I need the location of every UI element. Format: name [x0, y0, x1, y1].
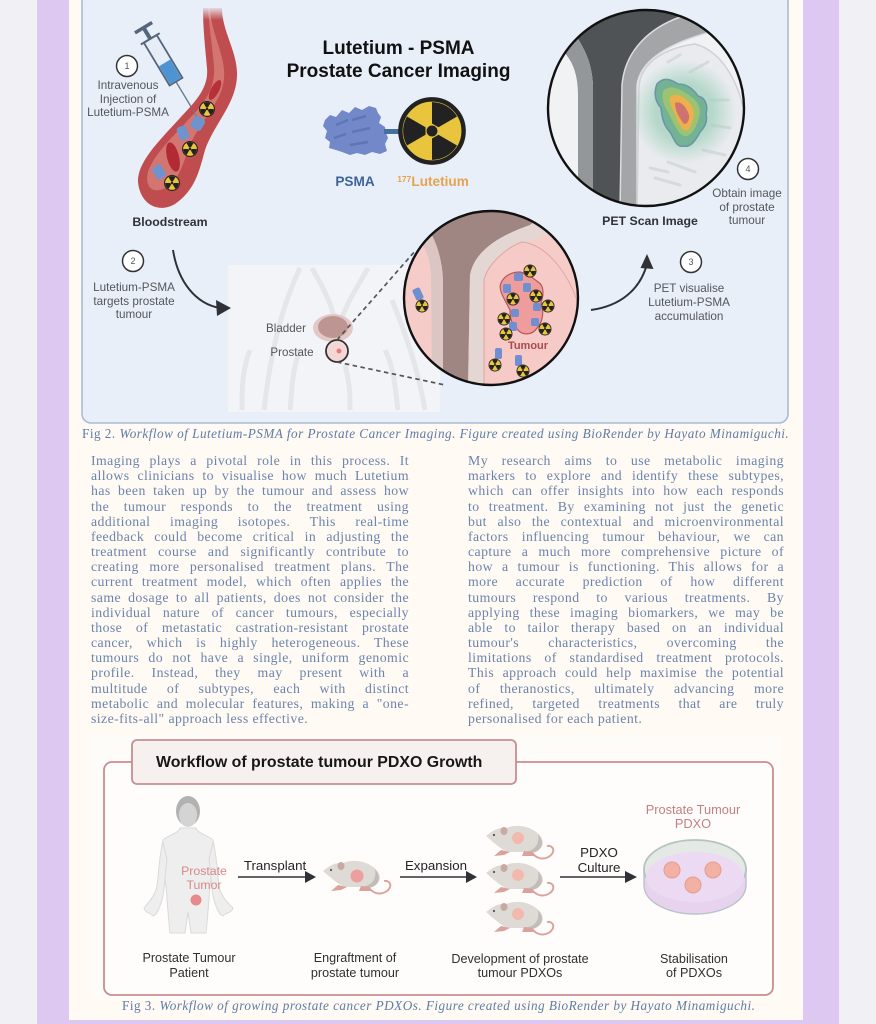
panel: PDXO workflow [90, 735, 780, 1000]
step 3 label: accumulation [655, 310, 723, 323]
PSMA label: PSMA [335, 174, 375, 189]
text block: right column: factors influencing tumour behaviour, we can [468, 529, 784, 544]
text block: right column: personalised for each patient. [468, 711, 642, 726]
arrow: PET visualise [591, 254, 654, 310]
caption: patient: Patient [169, 966, 209, 980]
text block: left column: profile. Instead, they may present with a [91, 665, 409, 680]
icon: PSMA protein [323, 106, 388, 155]
caption: engraftment: prostate tumour [311, 966, 399, 980]
caption: patient [142, 951, 236, 980]
icon: patient body [144, 796, 233, 933]
text block: left column: tumours do not have a single, uniform genomic [91, 650, 409, 665]
text block: left column: additional imaging isotopes. This real-time [91, 514, 409, 529]
icon: syringe [134, 22, 202, 116]
177Lutetium label: 177 [397, 174, 412, 184]
caption: patient: Prostate Tumour [142, 951, 236, 965]
arrow: targets prostate [173, 250, 231, 316]
step 1 label: Injection of [100, 93, 157, 106]
step 4 label: tumour [729, 214, 765, 227]
text block: left column: those of metastatic castration-resistant prostate [91, 620, 409, 635]
text block: left column: has been taken up by the tumour and assess how [91, 483, 409, 498]
text block: right column [468, 453, 784, 726]
text block: right column: refined, targeted treatments that are truly [468, 696, 784, 711]
step 3 label: PET visualise [654, 282, 724, 295]
step 4 label: of prostate [719, 201, 775, 214]
title [287, 38, 510, 82]
PDXO culture arrow: PDXO [580, 845, 618, 860]
text block: right column: which can offer insights into how each responds [468, 483, 784, 498]
bladder label: Bladder [266, 322, 306, 335]
prostate tumour PDXO label: PDXO [675, 816, 711, 831]
177Lutetium label: Lutetium [411, 174, 469, 189]
step 1 label: Lutetium-PSMA [87, 106, 169, 119]
PDXO culture arrow [560, 845, 637, 883]
step 1 label [87, 56, 169, 119]
text block: right column: limitations of standardised treatment protocols. [468, 650, 784, 665]
panel: Lutetium-PSMA imaging figure [82, 0, 788, 423]
caption: development: Development of prostate [451, 952, 589, 966]
step 2 label: 2 [130, 256, 136, 266]
step 1 label: Intravenous [97, 79, 159, 92]
figure 2 caption: Fig 2. Workflow of Lutetium-PSMA for Prostate Cancer Imaging. Figure created using BioRender by Hayato Minamiguchi. [82, 426, 789, 441]
text block: left column: allows clinicians to visualise how much Lutetium [91, 468, 409, 483]
text block: left column: Imaging plays a pivotal role in this process. It [91, 453, 409, 468]
text block: left column: feedback could become critical in adjusting the [91, 529, 409, 544]
caption: stabilisation [660, 952, 728, 980]
title: Lutetium - PSMA [322, 38, 475, 59]
icon: PSMA connector [384, 129, 400, 134]
caption: stabilisation: of PDXOs [666, 966, 722, 980]
text block: right column: how a tumour is functioning. This allows for a [468, 559, 784, 574]
text block: left column: individual nature of cancer tumours, especially [91, 605, 409, 620]
text block: right column: able to tailor therapy based on an individual [468, 620, 784, 635]
transplant arrow: Transplant [244, 858, 306, 873]
text block: left column: current treatment model, which often applies the [91, 574, 409, 589]
caption: engraftment: Engraftment of [314, 951, 397, 965]
step 2 label: targets prostate [93, 295, 175, 308]
step 3 label: Lutetium-PSMA [648, 296, 730, 309]
text block: right column: capture a much more comprehensive picture of [468, 544, 784, 559]
text block: right column: of theranostics, ultimately advancing more [468, 681, 784, 696]
text block: right column: markers to explore and identify these subtypes, [468, 468, 784, 483]
expansion arrow [400, 858, 477, 883]
text block: right column: but also the contextual and microenvironmental [468, 514, 784, 529]
PET scan label: PET Scan Image [602, 214, 698, 228]
step 4 label: 4 [745, 164, 751, 174]
caption: engraftment [311, 951, 399, 980]
title: Prostate Cancer Imaging [287, 61, 510, 82]
step 3 label: 3 [688, 257, 694, 267]
zoom circle: tumour with Lutetium-PSMA [402, 210, 580, 386]
text block: right column: more accurate prediction of how different [468, 574, 784, 589]
text block: left column: metabolic and molecular features, making a "one- [91, 696, 409, 711]
text block: left column: creating more personalised treatment plans. The [91, 559, 409, 574]
icon: blood vessel [138, 6, 237, 208]
text block: left column: the tumour responds to the treatment using [91, 499, 409, 514]
expansion arrow: Expansion [405, 858, 467, 873]
text block: right column: This approach could help maximise the potential [468, 665, 784, 680]
icon: radiation symbol [400, 99, 464, 163]
workflow header: Workflow of prostate tumour PDXO Growth [156, 754, 482, 771]
text block: right column: to treatment. By examining not just the genetic [468, 499, 784, 514]
prostate tumor label [181, 864, 227, 892]
prostate tumor label: Prostate [181, 864, 227, 878]
prostate tumour PDXO label: Prostate Tumour [646, 802, 741, 817]
text block: left column: size-fits-all" approach less effective. [91, 711, 308, 726]
figure 3 caption: Fig 3. Workflow of growing prostate cancer PDXOs. Figure created using BioRender by Hayato Minamiguchi. [122, 998, 755, 1013]
step 4 label [712, 158, 782, 227]
step 3 label [648, 252, 730, 323]
text block: left column: same dosage to all patients, does not consider the [91, 590, 409, 605]
icon: three PDXO mice [486, 826, 553, 934]
text block: right column: tumour's characteristics, overcoming the [468, 635, 784, 650]
text block: right column: My research aims to use metabolic imaging [468, 453, 784, 468]
caption: development: tumour PDXOs [478, 966, 562, 980]
tumour label: Tumour [508, 340, 549, 352]
prostate tumor label: Tumor [186, 878, 222, 892]
step 2 label [93, 250, 175, 321]
text block: right column: applying these imaging biomarkers, we may be [468, 605, 784, 620]
caption: stabilisation: Stabilisation [660, 952, 728, 966]
transplant arrow [238, 858, 316, 883]
bloodstream label: Bloodstream [132, 215, 208, 229]
icon: engrafted mouse [323, 861, 390, 893]
text block: left column: cancer, which is highly heterogeneous. These [91, 635, 409, 650]
prostate label: Prostate [270, 346, 314, 359]
pelvis illustration [228, 265, 440, 412]
text block: left column: treatment course and significantly contribute to [91, 544, 409, 559]
dashed zoom lines [337, 250, 445, 385]
PET scan circle [546, 8, 746, 208]
text block: right column: tumours respond to various treatments. By [468, 590, 784, 605]
text block: left column [91, 453, 409, 726]
icon: petri dish [644, 840, 746, 914]
step 4 label: Obtain image [712, 187, 782, 200]
workflow header [132, 740, 516, 784]
step 2 label: Lutetium-PSMA [93, 281, 175, 294]
PDXO culture arrow: Culture [578, 860, 620, 875]
step 2 label: tumour [116, 308, 152, 321]
prostate tumour PDXO label [646, 802, 741, 831]
step 1 label: 1 [124, 61, 130, 71]
caption: development [451, 952, 589, 980]
text block: left column: multitude of subtypes, each with distinct [91, 681, 409, 696]
